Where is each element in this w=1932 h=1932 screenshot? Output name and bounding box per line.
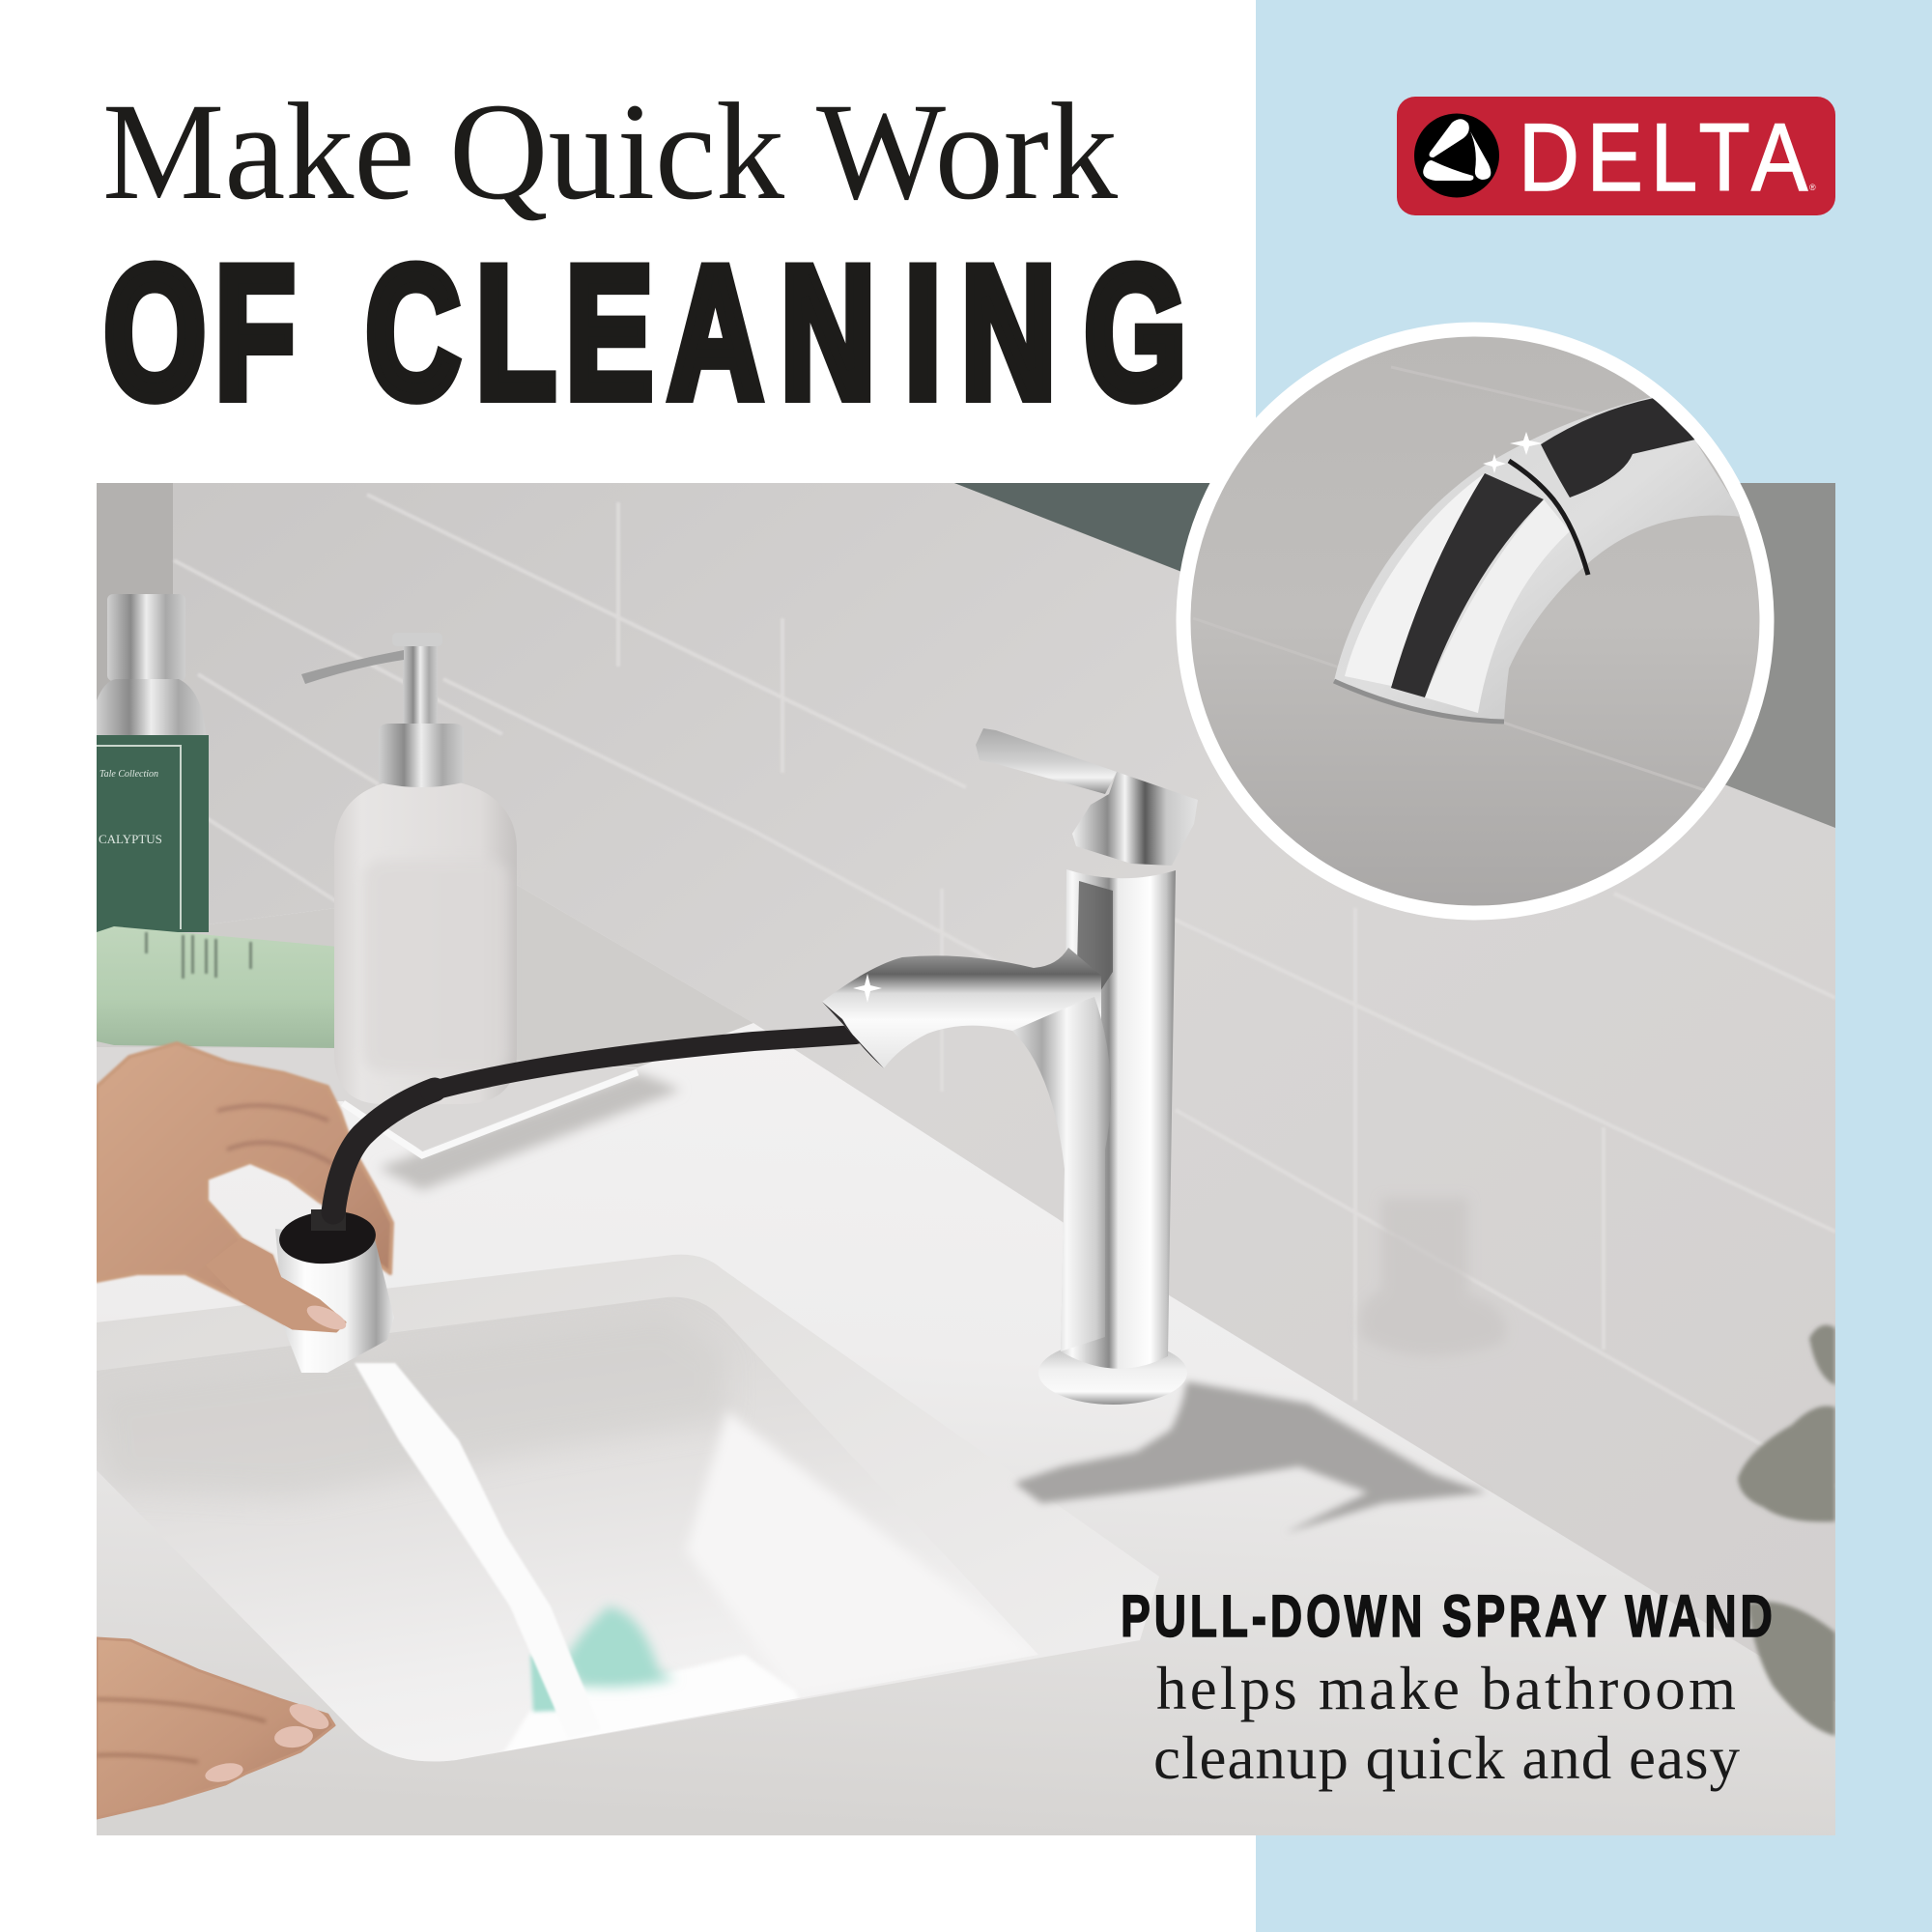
faucet base (1038, 1341, 1187, 1405)
left bright streak (1345, 473, 1485, 687)
thumb (208, 1239, 345, 1331)
faucet shadow (1014, 1381, 1487, 1533)
dark mirror reflection (954, 483, 1209, 572)
soap dispenser (301, 633, 517, 1104)
wand collar (311, 1209, 346, 1231)
caption: feature text (1121, 1584, 1773, 1792)
nails (204, 1699, 332, 1785)
dark reflection upper (1541, 398, 1695, 497)
green bottle (97, 594, 209, 932)
counter back surface shade (97, 885, 753, 1067)
caption line two: cleanup quick and easy (1153, 1724, 1741, 1792)
spray wand head (275, 1208, 394, 1373)
tile wall (173, 483, 1835, 1702)
mint soap (564, 1606, 676, 1687)
panel: bathroom photo (97, 483, 1835, 1835)
spout neck (1012, 997, 1111, 1351)
faint tile lines (1193, 367, 1768, 811)
fingers (97, 1638, 334, 1818)
basin right wall (690, 1414, 929, 1609)
black seam (1509, 461, 1588, 575)
bottle cap (107, 594, 185, 681)
towel foam (507, 1656, 796, 1750)
fingers and back of hand (97, 1043, 392, 1325)
grout lines (174, 495, 1835, 1487)
thumb over wand (208, 1239, 350, 1334)
mirror band (954, 483, 1835, 828)
soap tray lip (343, 1072, 638, 1155)
column reflection (1077, 881, 1113, 1005)
wand chrome body (275, 1229, 394, 1373)
soap tray shadow (379, 1072, 681, 1190)
panel: light blue column (1256, 0, 1932, 1932)
thumb nail (303, 1301, 350, 1334)
tube text (145, 932, 252, 979)
callout: magnified spout circle (1183, 329, 1768, 913)
logo: Delta badge (1397, 97, 1835, 215)
hose run (430, 1035, 856, 1092)
handle cap (1072, 772, 1198, 866)
label frame (97, 746, 181, 929)
label text top: Tale Collection (99, 769, 158, 780)
dispenser inner liquid (363, 860, 508, 1072)
spout shape (1334, 397, 1744, 722)
faucet column (1061, 869, 1176, 1369)
spout outlet (822, 1002, 884, 1068)
basin shading group (97, 1314, 1038, 1768)
knuckle shading (217, 1105, 333, 1164)
sink rim (97, 1255, 1159, 1761)
dispenser body (334, 782, 517, 1104)
spout sparkle (853, 974, 882, 1003)
faucet (822, 728, 1198, 1405)
bottle label (97, 735, 209, 932)
hose near wand (333, 1090, 435, 1212)
spout lip (1334, 681, 1504, 722)
sparkles (1483, 432, 1543, 473)
title: serif line: Make Quick Work (102, 75, 1118, 229)
logo white triangle (1423, 119, 1491, 181)
title: bold line: OF CLEANING (104, 228, 1186, 438)
finger separations (97, 1699, 266, 1762)
circle white ring (1183, 329, 1767, 913)
logo red background (1397, 97, 1835, 215)
basin back wall shade (118, 1349, 715, 1488)
dispenser collar (379, 724, 464, 787)
soap tray surface (97, 1047, 638, 1151)
bottle shoulder (97, 679, 206, 736)
caption heading: PULL-DOWN SPRAY WAND (1121, 1584, 1773, 1650)
caption line one: helps make bathroom (1156, 1655, 1736, 1722)
countertop (97, 885, 1835, 1835)
pump neck (403, 642, 438, 724)
pump cap (392, 633, 442, 646)
spout arm (822, 948, 1101, 1068)
logo wordmark: DELTA (1519, 104, 1807, 211)
left side wall (97, 483, 173, 699)
sink basin (97, 1296, 765, 1762)
black hose (333, 1035, 856, 1212)
mint soap left (530, 1655, 557, 1712)
hand holding wand (97, 1043, 392, 1325)
logo black circle (1414, 114, 1499, 197)
green tube (97, 926, 338, 1048)
label text main: CALYPTUS (99, 832, 162, 846)
tube body (97, 926, 338, 1048)
faucet reflection on wall (1366, 1203, 1499, 1350)
leaf shadows (1738, 1325, 1835, 1736)
logo registered mark: ® (1809, 183, 1816, 192)
dark streak (1391, 473, 1544, 697)
pump spout (301, 650, 404, 684)
magnified spout (1193, 367, 1768, 811)
wand black disc (277, 1208, 378, 1266)
water stream (355, 1362, 585, 1712)
handle lever (976, 728, 1117, 794)
white streak (1425, 499, 1570, 713)
second hand (97, 1638, 334, 1818)
